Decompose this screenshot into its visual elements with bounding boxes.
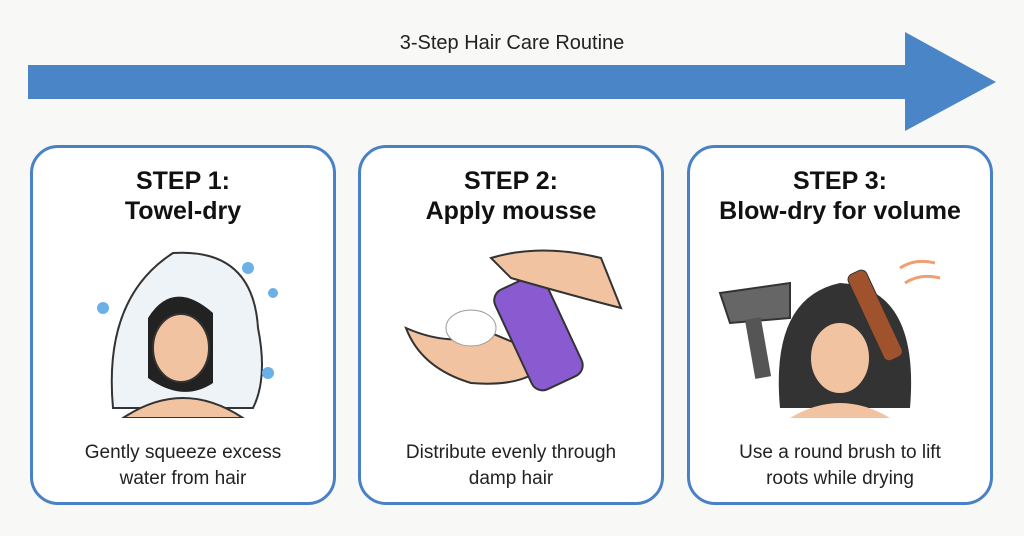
heading 1 xyxy=(125,167,241,225)
caption 3: roots while drying xyxy=(766,468,914,489)
caption 1: water from hair xyxy=(120,468,246,489)
caption 3 xyxy=(739,442,941,489)
panel: step 2 xyxy=(358,145,664,505)
heading 2: STEP 2: xyxy=(464,167,558,195)
panel: step 3 xyxy=(687,145,993,505)
heading 3: Blow-dry for volume xyxy=(719,197,961,225)
panel: step 1 xyxy=(30,145,336,505)
caption 2 xyxy=(406,442,616,489)
caption 2: Distribute evenly through xyxy=(406,442,616,463)
arrow xyxy=(28,32,996,131)
illustration: blow-dry xyxy=(718,260,940,418)
heading 1: STEP 1: xyxy=(136,167,230,195)
heading 1: Towel-dry xyxy=(125,197,241,225)
heading 2 xyxy=(426,167,596,225)
heading 3: STEP 3: xyxy=(793,167,887,195)
title: 3-Step Hair Care Routine xyxy=(400,32,624,54)
heading 3 xyxy=(719,167,961,225)
illustration: towel xyxy=(97,252,278,418)
caption 1: Gently squeeze excess xyxy=(85,442,281,463)
caption 3: Use a round brush to lift xyxy=(739,442,941,463)
illustration: mousse xyxy=(404,250,623,392)
caption 1 xyxy=(85,442,281,489)
heading 2: Apply mousse xyxy=(426,197,596,225)
caption 2: damp hair xyxy=(469,468,553,489)
